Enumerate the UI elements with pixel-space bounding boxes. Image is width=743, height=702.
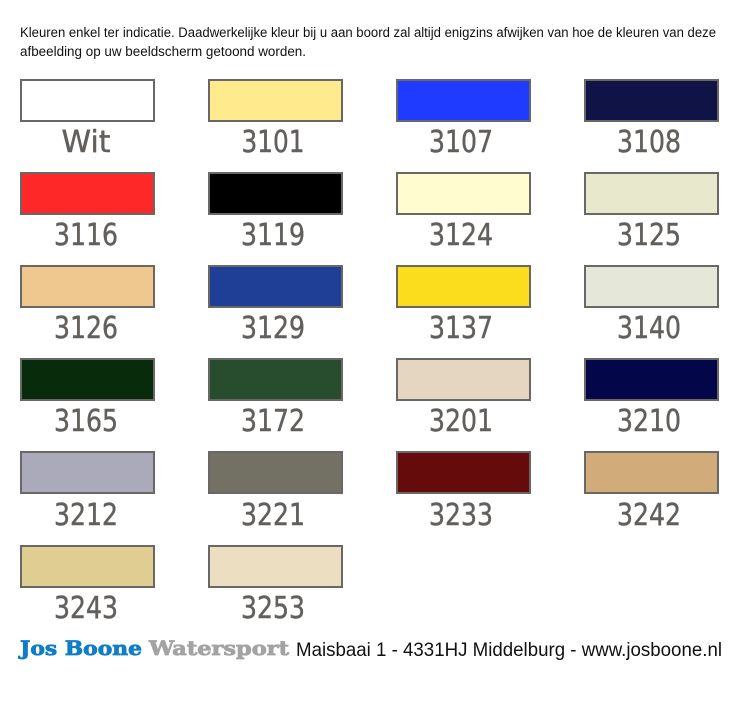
swatch: 3107 [397, 80, 530, 160]
swatch: 3253 [209, 546, 342, 626]
swatch: 3116: 3116 [54, 218, 118, 253]
swatch: 3124 [397, 173, 530, 253]
swatch: 3108: 3108 [617, 125, 681, 160]
swatch: 3253: 3253 [241, 591, 305, 626]
swatch: 3165: 3165 [54, 404, 118, 439]
swatch: 3137 [397, 266, 530, 346]
swatch: 3221 [209, 452, 342, 533]
swatch: 3101 [209, 80, 342, 160]
swatch: 3210: 3210 [617, 404, 681, 439]
brand name: Watersport: Watersport [148, 636, 290, 660]
swatch: 3140: 3140 [617, 311, 681, 346]
address line: Maisbaai 1 - 4331HJ Middelburg - www.josboone.nl [296, 639, 722, 661]
swatch: 3172: 3172 [241, 404, 305, 439]
swatch: 3119 [209, 173, 342, 253]
swatch: 3129 [209, 266, 342, 346]
intro note: afbeelding op uw beeldscherm getoond worden. [20, 44, 306, 59]
footer [18, 636, 722, 661]
intro note: Kleuren enkel ter indicatie. Daadwerkelijke kleur bij u aan boord zal altijd enigzins afwijken van hoe de kleuren van deze [20, 25, 716, 40]
swatch: 3101: 3101 [242, 125, 304, 160]
swatch: 3137: 3137 [429, 311, 493, 346]
swatch: 3242: 3242 [617, 498, 681, 533]
swatch: 3119: 3119 [241, 218, 305, 253]
swatch: 3116 [21, 173, 154, 253]
swatch: 3108 [585, 80, 718, 160]
swatch: 3212 [21, 452, 154, 533]
swatch: 3124: 3124 [429, 218, 493, 253]
swatch: 3125: 3125 [617, 218, 681, 253]
intro note [20, 25, 716, 59]
swatch: 3212: 3212 [54, 498, 118, 533]
swatch: 3165 [21, 359, 154, 439]
swatch: 3172 [209, 359, 342, 439]
swatch: 3201 [397, 359, 530, 439]
swatch: 3126: 3126 [54, 311, 118, 346]
swatch: 3210 [585, 359, 718, 439]
brand name: Jos Boone: Jos Boone [18, 636, 142, 660]
swatch: 3221: 3221 [241, 498, 305, 533]
swatch: 3233 [397, 452, 530, 533]
swatch: Wit [21, 80, 154, 160]
swatch: Wit: Wit [62, 125, 111, 160]
swatch: 3233: 3233 [429, 498, 493, 533]
swatch: 3107: 3107 [429, 125, 493, 160]
swatch: 3201: 3201 [429, 404, 493, 439]
swatch: 3129: 3129 [241, 311, 305, 346]
swatch: 3140 [585, 266, 718, 346]
swatch: 3125 [585, 173, 718, 253]
swatch: 3243: 3243 [54, 591, 118, 626]
swatch: 3242 [585, 452, 718, 533]
swatch: 3126 [21, 266, 154, 346]
swatch: 3243 [21, 546, 154, 626]
